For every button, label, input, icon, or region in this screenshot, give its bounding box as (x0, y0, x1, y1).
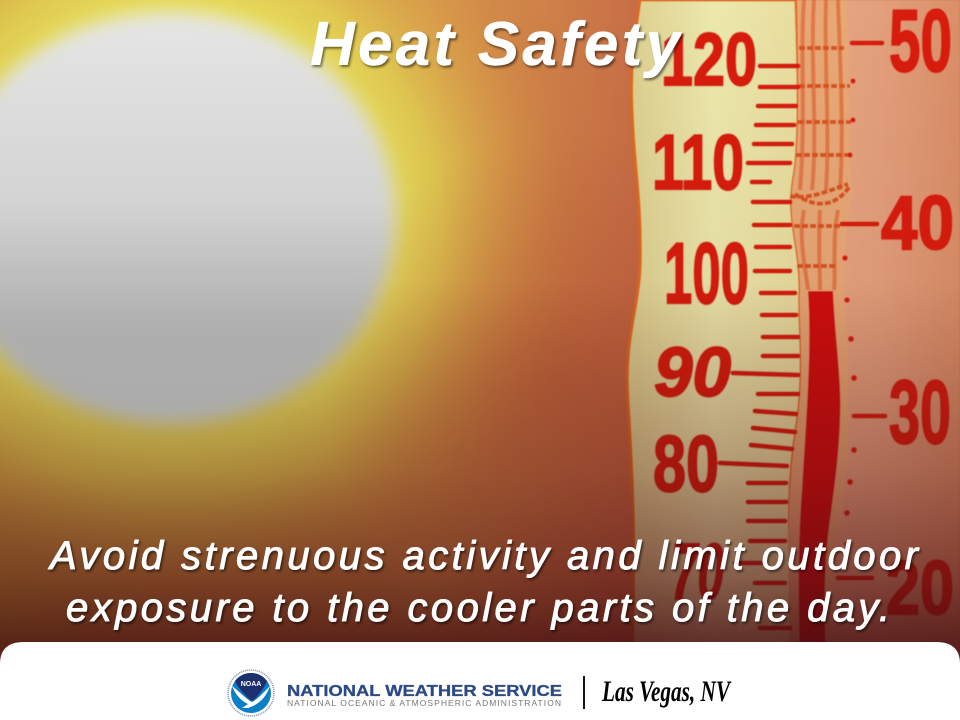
icon: NOAA logo (228, 670, 274, 716)
celsius numbers (881, 0, 954, 631)
thermometer left scale strip (627, 0, 801, 670)
thermometer (627, 0, 960, 670)
fahrenheit tick marks (720, 66, 798, 628)
caption line 1: Avoid strenuous activity and limit outdoor (48, 534, 920, 578)
caption (48, 534, 920, 630)
fahrenheit numbers: 120 (661, 18, 757, 101)
title: Heat Safety (310, 10, 684, 79)
fahrenheit numbers: 110 (652, 118, 744, 206)
celsius dots (842, 78, 857, 547)
mercury column (799, 291, 840, 670)
National Weather Service wordmark: NATIONAL WEATHER SERVICE (287, 683, 562, 700)
fahrenheit numbers (652, 18, 757, 616)
bottom dark vignette (0, 207, 960, 663)
divider (583, 676, 585, 709)
celsius dashes (838, 43, 885, 578)
caption line 2: exposure to the cooler parts of the day. (66, 586, 890, 630)
fahrenheit numbers: 100 (664, 226, 749, 322)
thermometer right scale backing (834, 0, 960, 642)
footer panel (0, 642, 960, 720)
fahrenheit numbers: 90 (654, 333, 731, 411)
fahrenheit numbers: 70 (671, 527, 724, 616)
office location: Las Vegas, NV (601, 675, 732, 708)
red glow beside the thermometer (356, 199, 637, 496)
National Weather Service wordmark: NATIONAL OCEANIC & ATMOSPHERIC ADMINISTRATION (287, 698, 561, 708)
fahrenheit numbers: 80 (653, 419, 719, 508)
National Weather Service wordmark (287, 683, 562, 708)
thermometer glass tube (788, 0, 852, 670)
sun disc (0, 12, 396, 424)
icon: NOAA logo: NOAA (241, 681, 261, 688)
yellow halo around the sun (0, 0, 523, 526)
